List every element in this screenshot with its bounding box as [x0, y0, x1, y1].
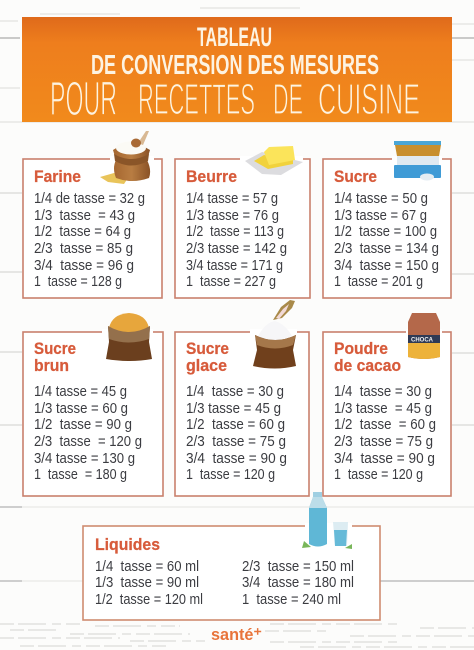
conversions: liquides column 1 [95, 559, 203, 608]
icon: flour sack [100, 131, 150, 184]
conversions: beurre: 1/2 tasse = 113 g [186, 224, 284, 240]
icon: butter [245, 146, 303, 175]
panel: sucre [323, 141, 451, 298]
conversions: sucre glace: 1 tasse = 120 g [186, 467, 275, 483]
conversions: sucre brun: 2/3 tasse = 120 g [34, 434, 142, 450]
icon: sugar box [394, 141, 441, 180]
conversions: sucre glace: 1/2 tasse = 60 g [186, 417, 285, 433]
conversions: beurre [186, 191, 287, 290]
panel: beurre [175, 146, 310, 298]
conversions: farine: 1 tasse = 128 g [34, 274, 122, 290]
conversions: sucre brun: 1/3 tasse = 60 g [34, 401, 128, 417]
conversions: sucre brun: 1/2 tasse = 90 g [34, 417, 132, 433]
banner [22, 17, 452, 126]
conversions: sucre: 2/3 tasse = 134 g [334, 241, 439, 257]
conversions: poudre de cacao: 1/3 tasse = 45 g [334, 401, 432, 417]
conversions: sucre: 1/3 tasse = 67 g [334, 208, 427, 224]
title line 3: DE [273, 75, 303, 124]
conversions: sucre glace: 2/3 tasse = 75 g [186, 434, 286, 450]
conversions: sucre: 1/4 tasse = 50 g [334, 191, 428, 207]
conversions: beurre: 1 tasse = 227 g [186, 274, 276, 290]
conversions: beurre: 1/4 tasse = 57 g [186, 191, 278, 207]
conversions: sucre glace [186, 384, 287, 483]
heading: sucre brun: Sucre [34, 340, 76, 358]
panel: farine [23, 131, 162, 298]
conversions: farine: 1/2 tasse = 64 g [34, 224, 131, 240]
icon: brown sugar sack [106, 313, 152, 361]
heading: sucre glace: Sucre [186, 340, 229, 358]
conversions: liquides column 2: 1 tasse = 240 ml [242, 592, 341, 608]
logo: sante+: santé⁺ [211, 625, 262, 644]
conversions: poudre de cacao: 2/3 tasse = 75 g [334, 434, 433, 450]
conversions: beurre: 3/4 tasse = 171 g [186, 258, 283, 274]
title line 3 [50, 73, 420, 126]
icon: cocoa bag: CHOCA [411, 338, 434, 344]
heading: farine: Farine [34, 168, 81, 186]
conversions: sucre brun [34, 384, 142, 483]
conversions: poudre de cacao: 3/4 tasse = 90 g [334, 451, 435, 467]
conversions: sucre: 1/2 tasse = 100 g [334, 224, 437, 240]
conversions: farine: 2/3 tasse = 85 g [34, 241, 133, 257]
conversions: poudre de cacao [334, 384, 436, 483]
conversions: farine: 1/4 de tasse = 32 g [34, 191, 145, 207]
title line 1: TABLEAU [197, 22, 272, 52]
conversions: sucre glace: 1/4 tasse = 30 g [186, 384, 284, 400]
conversions: sucre glace: 3/4 tasse = 90 g [186, 451, 287, 467]
conversions: sucre brun: 1 tasse = 180 g [34, 467, 127, 483]
heading: liquides: Liquides [95, 536, 160, 554]
heading: sucre brun [34, 340, 76, 375]
icon: icing sugar sack [253, 300, 296, 368]
heading: poudre de cacao: de cacao [334, 357, 401, 375]
conversions: farine [34, 191, 145, 290]
conversions: sucre [334, 191, 439, 290]
conversions: liquides column 1: 1/4 tasse = 60 ml [95, 559, 199, 575]
conversions: sucre: 1 tasse = 201 g [334, 274, 423, 290]
conversions: beurre: 1/3 tasse = 76 g [186, 208, 279, 224]
conversions: liquides column 2: 2/3 tasse = 150 ml [242, 559, 354, 575]
conversions: poudre de cacao: 1 tasse = 120 g [334, 467, 423, 483]
heading: poudre de cacao: Poudre [334, 340, 388, 358]
conversions: liquides column 2: 3/4 tasse = 180 ml [242, 575, 354, 591]
conversions: farine: 3/4 tasse = 96 g [34, 258, 134, 274]
conversions: liquides column 1: 1/2 tasse = 120 ml [95, 592, 203, 608]
title line 3: RECETTES [138, 75, 255, 124]
conversions: beurre: 2/3 tasse = 142 g [186, 241, 287, 257]
conversions: poudre de cacao: 1/4 tasse = 30 g [334, 384, 432, 400]
conversions: liquides column 2 [242, 559, 354, 608]
panel: liquides [83, 492, 380, 620]
conversions: liquides column 1: 1/3 tasse = 90 ml [95, 575, 199, 591]
panel: sucre brun [23, 313, 163, 496]
title line 3: POUR [50, 73, 117, 126]
heading: sucre: Sucre [334, 168, 377, 186]
panel: poudre de cacao [323, 313, 451, 496]
conversions: sucre brun: 1/4 tasse = 45 g [34, 384, 127, 400]
conversions: poudre de cacao: 1/2 tasse = 60 g [334, 417, 436, 433]
conversions: farine: 1/3 tasse = 43 g [34, 208, 135, 224]
heading: sucre glace [186, 340, 229, 375]
heading: beurre: Beurre [186, 168, 237, 186]
heading: poudre de cacao [334, 340, 401, 375]
conversions: sucre brun: 3/4 tasse = 130 g [34, 451, 135, 467]
panel: sucre glace [175, 300, 309, 496]
heading: sucre glace: glace [186, 357, 227, 375]
conversions: sucre: 3/4 tasse = 150 g [334, 258, 439, 274]
icon: water bottle and glass [302, 492, 352, 549]
conversions: sucre glace: 1/3 tasse = 45 g [186, 401, 281, 417]
heading: sucre brun: brun [34, 357, 69, 375]
icon: cocoa bag [408, 313, 440, 359]
